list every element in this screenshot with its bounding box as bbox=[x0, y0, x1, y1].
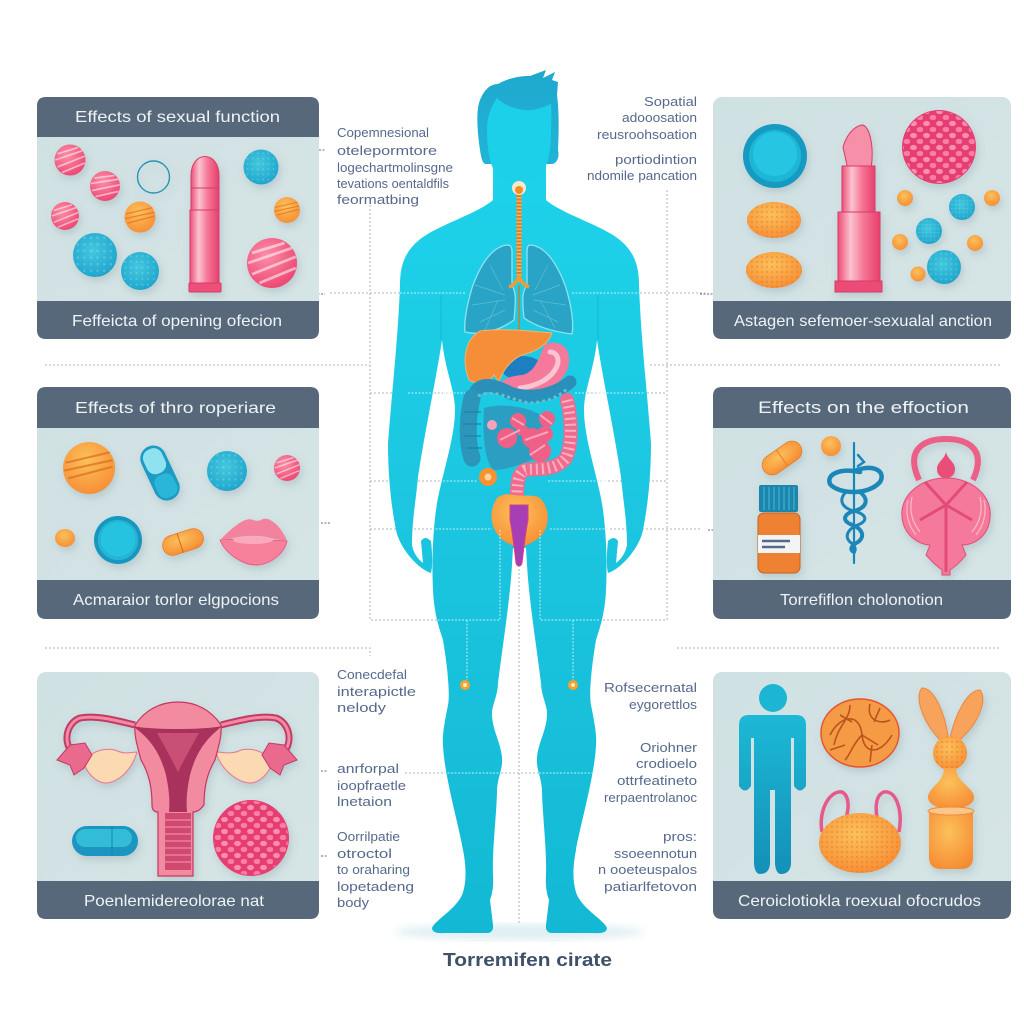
stomach bbox=[498, 343, 569, 396]
orange tablets bbox=[746, 202, 802, 288]
footer label: Torrefiflon cholonotion bbox=[780, 592, 943, 609]
text block: upper right notes: reusroohsoation bbox=[597, 127, 697, 142]
lipstick bbox=[835, 125, 882, 292]
person icon bbox=[739, 684, 806, 874]
text block: upper right notes: adooosation bbox=[622, 110, 697, 125]
body silhouette bbox=[388, 165, 651, 933]
text block: lower right notes 1: Rofsecernatal bbox=[604, 680, 697, 695]
text block: lower left notes 3: body bbox=[337, 895, 370, 910]
fallopian tubes bbox=[67, 717, 289, 752]
ovaries bbox=[84, 749, 272, 783]
disc pill bbox=[743, 124, 807, 188]
text block: lower left notes 2: lnetaion bbox=[337, 794, 392, 809]
text block: upper left notes bbox=[337, 125, 453, 207]
header bar bbox=[713, 387, 1011, 428]
appendix ring bbox=[479, 468, 497, 486]
text block: lower left notes 1: interapictle bbox=[337, 684, 416, 699]
text block: lower left notes 1: Conecdefal bbox=[337, 667, 407, 682]
orange ball with pink handles bbox=[819, 792, 901, 873]
footer label: Feffeicta of opening ofecion bbox=[72, 313, 282, 330]
text block: lower left notes 1: nelody bbox=[337, 700, 387, 715]
text block: lower right notes 3: patiarlfetovon bbox=[604, 879, 697, 894]
liver bbox=[465, 330, 552, 383]
footer bar bbox=[713, 301, 1011, 339]
orange capsule and tablet bbox=[758, 436, 841, 479]
blue pill bbox=[72, 826, 138, 856]
text block: lower right notes 2 bbox=[604, 740, 698, 805]
text block: upper right notes: Sopatial bbox=[644, 94, 697, 109]
footer label: Astagen sefemoer-sexualal anction bbox=[734, 313, 992, 330]
bladder and prostate bbox=[492, 494, 548, 546]
panel: top right bbox=[713, 97, 1011, 339]
text block: lower left notes 3: to oraharing bbox=[337, 862, 410, 877]
callout leader lines bbox=[45, 132, 1000, 925]
text block: lower right notes 3: pros: bbox=[663, 829, 697, 844]
text block: upper right notes bbox=[587, 94, 697, 183]
pelvic organ bbox=[902, 439, 990, 575]
text block: upper left notes: Copemnesional bbox=[337, 125, 429, 140]
panel: bottom right bbox=[713, 672, 1011, 919]
text block: lower right notes 2: Oriohner bbox=[640, 740, 698, 755]
title: Torremifen cirate bbox=[443, 950, 612, 970]
text block: lower right notes 1 bbox=[604, 680, 698, 712]
footer bar bbox=[37, 881, 319, 919]
text block: upper left notes: tevations oentaldfils bbox=[337, 176, 449, 191]
text block: lower right notes 3: ssoeennotun bbox=[614, 846, 697, 861]
hair and head bbox=[477, 70, 559, 182]
header bar bbox=[37, 387, 319, 428]
pills bbox=[55, 441, 300, 564]
heading: Effects of thro roperiare bbox=[75, 400, 276, 417]
medicine bottle bbox=[758, 485, 800, 573]
windpipe bbox=[509, 181, 529, 340]
lips bbox=[220, 519, 287, 565]
urethra bbox=[510, 505, 528, 566]
lipstick tube bbox=[189, 156, 221, 292]
header bar bbox=[37, 97, 319, 137]
footer bar bbox=[37, 580, 319, 619]
caduceus bbox=[829, 443, 882, 563]
text block: lower left notes 2 bbox=[337, 761, 406, 809]
knee markers bbox=[460, 680, 578, 690]
text block: lower left notes 3: Oorrilpatie bbox=[337, 829, 400, 844]
text block: lower right notes 3: n ooeteuspalos bbox=[598, 862, 698, 877]
lungs bbox=[465, 245, 573, 334]
panel: top left bbox=[37, 97, 319, 339]
text block: lower left notes 3: lopetadeng bbox=[337, 879, 414, 894]
descending colon and rectum bbox=[516, 400, 571, 510]
fimbriae bbox=[57, 743, 92, 775]
text block: lower left notes 2: anrforpal bbox=[337, 761, 399, 776]
small pills bbox=[892, 190, 1000, 284]
text block: lower left notes 3 bbox=[337, 829, 414, 910]
footer label: Ceroiclotiokla roexual ofocrudos bbox=[738, 893, 981, 910]
text block: lower left notes 2: ioopfraetle bbox=[337, 778, 406, 793]
text block: upper left notes: feormatbing bbox=[337, 192, 419, 207]
panel: middle right bbox=[713, 387, 1011, 619]
text block: lower right notes 2: rerpaentrolanoc bbox=[604, 790, 698, 805]
ground shadow bbox=[394, 924, 644, 940]
textured pink ball bbox=[213, 800, 289, 876]
text block: upper right notes: portiodintion bbox=[615, 152, 697, 167]
white callout lines on the body bbox=[400, 293, 645, 773]
text block: upper right notes: ndomile pancation bbox=[587, 168, 697, 183]
footer bar bbox=[37, 301, 319, 339]
text block: lower right notes 2: ottrfeatineto bbox=[617, 773, 697, 788]
text block: lower left notes 3: otroctol bbox=[337, 846, 392, 861]
footer bar bbox=[713, 580, 1011, 619]
text block: upper left notes: otelepormtore bbox=[337, 143, 437, 158]
human body figure bbox=[388, 70, 651, 933]
small intestine bbox=[483, 406, 555, 470]
panel: middle left bbox=[37, 387, 319, 619]
uterus diagram bbox=[57, 702, 297, 876]
footer label: Acmaraior torlor elgpocions bbox=[73, 592, 279, 609]
panel: bottom left bbox=[37, 672, 319, 919]
text block: lower right notes 1: eygorettlos bbox=[629, 697, 698, 712]
text block: upper left notes: logechartmolinsgne bbox=[337, 160, 453, 175]
text block: lower left notes 1 bbox=[337, 667, 416, 715]
uterus body bbox=[135, 702, 221, 876]
brain bbox=[821, 699, 899, 767]
footer label: Poenlemidereolorae nat bbox=[84, 893, 265, 910]
textured pink ball bbox=[902, 110, 976, 184]
faint torso contours bbox=[441, 295, 598, 340]
uterine cavity bbox=[133, 726, 222, 812]
heading: Effects of sexual function bbox=[75, 109, 280, 126]
heading: Effects on the effoction bbox=[758, 398, 969, 417]
pills bbox=[51, 144, 300, 290]
large intestine, blue bbox=[463, 382, 570, 458]
text block: lower right notes 3 bbox=[598, 829, 698, 894]
orange object bbox=[919, 688, 983, 869]
cervix bbox=[165, 813, 191, 870]
text block: lower right notes 2: crodioelo bbox=[636, 756, 697, 771]
blue organ behind stomach bbox=[501, 356, 543, 380]
footer bar bbox=[713, 881, 1011, 919]
